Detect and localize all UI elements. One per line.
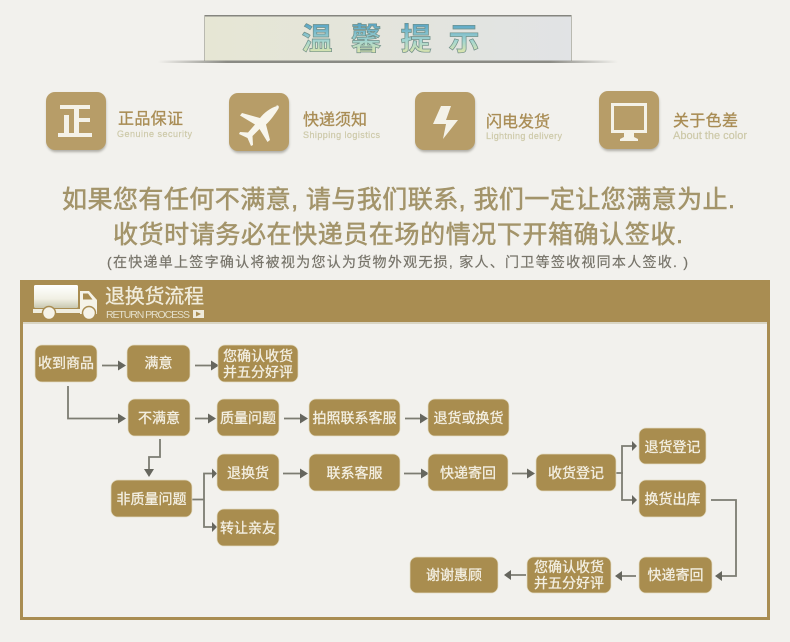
notice text line 2: 收货时请务必在快递员在场的情况下开箱确认签收. [113,221,683,249]
feature: about the color: About the color [673,130,747,142]
icon: airplane [239,105,279,146]
feature: lightning delivery: Lightning delivery [486,131,562,141]
step: express return [428,454,508,491]
step: contact service: 联系客服 [326,465,382,481]
title text: 提 [400,22,432,57]
feature: genuine security: Genuine security [117,129,192,139]
panel: return process [20,280,770,618]
feature: about the color [599,91,747,151]
step: quality problem: 质量问题 [220,410,276,426]
title text [302,22,480,57]
step: quality problem [217,399,279,436]
step: confirm and rate [218,345,298,382]
feature: lightning delivery [415,92,562,152]
title banner [158,15,618,63]
icon: zheng character [58,105,92,137]
small note: (在快递单上签字确认将被视为您认为货物外观无损, 家人、门卫等签收视同本人签收. ) [107,254,688,270]
step: thank you: 谢谢惠顾 [426,567,482,583]
step: transfer to friends: 转让亲友 [220,520,276,536]
step: receipt registration: 收货登记 [548,465,604,481]
icon: truck [33,285,97,320]
step: photo and contact [309,399,400,436]
step: return exchange: 退换货 [227,465,269,481]
feature: genuine security: 正品保证 [118,110,183,128]
step: non quality problem: 非质量问题 [116,491,186,507]
step: exchange dispatch: 换货出库 [644,491,700,507]
step: photo and contact: 拍照联系客服 [312,410,396,426]
step: non quality problem [111,480,192,517]
step: return registration: 退货登记 [644,439,700,455]
step: satisfied: 满意 [144,355,172,371]
panel header [20,280,770,322]
flowchart connectors [68,360,736,581]
icon: lightning bolt [433,106,458,139]
step: thank you [410,557,498,593]
title text: 馨 [350,22,382,57]
step: confirm and rate again: 您确认收货 [534,559,604,575]
feature: lightning delivery: 闪电发货 [486,113,550,131]
step: confirm and rate again: 并五分好评 [534,575,604,591]
feature: shipping logistics [229,93,380,153]
step: confirm and rate: 并五分好评 [223,364,293,380]
title text: 示 [448,22,480,57]
feature: shipping logistics: 快递须知 [303,111,367,129]
feature: genuine security [46,92,192,152]
step: contact service [309,454,400,491]
step: confirm and rate again [527,557,611,593]
notice text line 1: 如果您有任何不满意, 请与我们联系, 我们一定让您满意为止. [62,186,735,214]
icon: small arrow tag [193,310,204,318]
step: exchange dispatch [639,480,706,517]
panel subheading: RETURN PROCESS [106,309,190,321]
step: transfer to friends [217,509,279,546]
step: return exchange [217,454,279,491]
icon: monitor [611,103,647,141]
flowchart: row one: 收到商品 [38,355,94,371]
feature: about the color: 关于色差 [673,112,738,130]
step: not satisfied [128,399,190,436]
step: express back [639,557,712,593]
step: return or exchange [428,399,509,436]
step: express back: 快递寄回 [648,567,704,583]
step: satisfied [127,345,190,382]
step: receipt registration [536,454,616,491]
panel heading: 退换货流程 [105,285,204,308]
step: confirm and rate: 您确认收货 [223,348,293,364]
step: express return: 快递寄回 [440,465,496,481]
flowchart: row one [35,345,97,382]
step: return or exchange: 退货或换货 [434,410,504,426]
step: not satisfied: 不满意 [138,410,180,426]
title text: 温 [302,22,332,57]
step: return registration [639,428,706,464]
feature: shipping logistics: Shipping logistics [303,130,380,140]
